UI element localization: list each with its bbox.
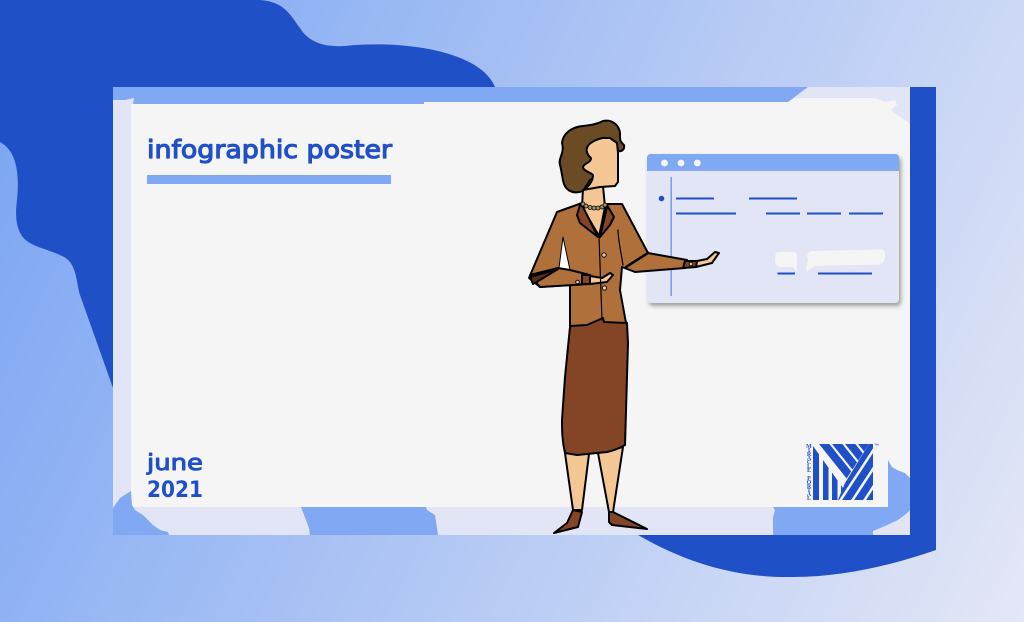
neck and chest — [582, 186, 605, 237]
panel white area — [131, 98, 910, 507]
bottom left blotch — [113, 491, 169, 535]
left hand — [590, 273, 613, 284]
necklace — [581, 202, 607, 210]
bullet dot — [659, 196, 664, 201]
window header bar — [647, 154, 899, 171]
background blob: right band and bottom curve — [638, 87, 936, 577]
background blob: top left — [0, 0, 495, 388]
buttons — [576, 253, 693, 290]
jacket seams — [599, 230, 623, 320]
panel: poster card — [113, 87, 910, 535]
lapels — [577, 205, 614, 237]
window body — [647, 154, 899, 303]
elbow fold right — [626, 253, 648, 267]
speech bubble large — [806, 250, 885, 272]
skirt — [562, 318, 628, 455]
top band — [113, 87, 808, 104]
logo wordmark: MIRACLE PORTAL — [806, 444, 812, 500]
bottom middle blotch — [301, 507, 438, 535]
woman presenter figure — [529, 121, 719, 533]
right hand — [696, 252, 719, 267]
cuffs — [582, 261, 697, 284]
forearm left — [530, 268, 590, 287]
hair — [560, 121, 624, 192]
logo upper diagonal stripes — [819, 444, 869, 478]
window control dots — [661, 160, 701, 166]
logo vertical bars — [813, 444, 845, 500]
jacket — [529, 203, 687, 326]
logo: Miracle Portal — [806, 444, 878, 500]
white gap between arm and body — [559, 237, 570, 270]
shoes — [554, 510, 647, 533]
content lines — [676, 198, 883, 274]
logo trademark: ™ — [874, 443, 879, 449]
date: year: 2021 — [147, 478, 203, 503]
logo right diagonal stripes — [838, 444, 873, 500]
bottom right blotch — [773, 460, 910, 535]
title underline bar — [147, 175, 391, 184]
title: infographic poster — [147, 135, 393, 164]
face — [583, 138, 618, 190]
browser window panel — [647, 154, 899, 303]
date: month: june — [146, 451, 203, 476]
speech bubble small — [775, 252, 797, 272]
vertical rule — [670, 177, 672, 296]
legs — [565, 447, 623, 512]
elbow fold left — [530, 269, 558, 284]
panel base — [113, 87, 910, 535]
